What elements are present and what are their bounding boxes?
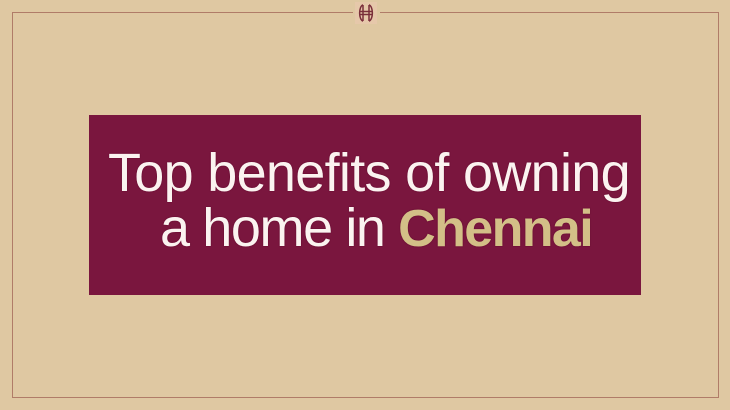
title banner (89, 115, 641, 295)
heading: line one: Top benefits of owning (108, 143, 630, 203)
heading: line two: a home in Chennai (160, 198, 592, 258)
icon: logo monogram (358, 4, 374, 22)
